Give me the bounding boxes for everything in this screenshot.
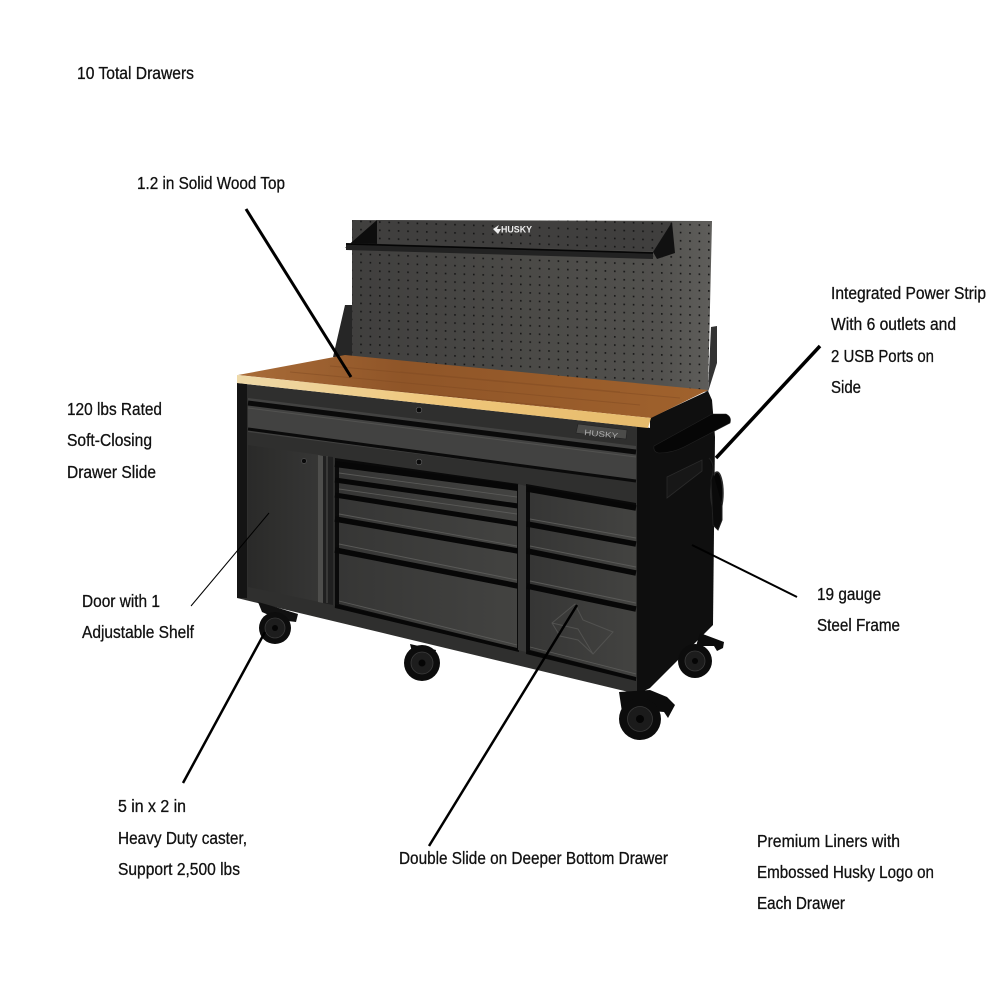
leader: wood top bbox=[246, 209, 351, 377]
leader lines bbox=[183, 209, 820, 846]
caster: front right with brake bbox=[619, 690, 675, 740]
right drawer stack bbox=[526, 484, 636, 681]
Husky badge: HUSKY bbox=[584, 428, 619, 441]
pegboard back panel bbox=[333, 220, 717, 392]
side frame bbox=[650, 391, 715, 688]
label: caster bbox=[118, 796, 247, 879]
label: premium liners bbox=[757, 831, 934, 913]
label: power strip: With 6 outlets and bbox=[831, 314, 956, 334]
leader: bottom drawer bbox=[429, 605, 577, 846]
drawer column divider bbox=[518, 484, 526, 652]
label: drawer slide: Soft-Closing bbox=[67, 430, 152, 450]
label: premium liners: Premium Liners with bbox=[757, 831, 900, 851]
label: steel frame: 19 gauge bbox=[817, 584, 881, 604]
label: premium liners: Embossed Husky Logo on bbox=[757, 862, 934, 882]
label: drawer slide: 120 lbs Rated bbox=[67, 399, 162, 419]
label: door shelf: Adjustable Shelf bbox=[82, 622, 194, 642]
wood top surface bbox=[238, 355, 708, 418]
label: premium liners: Each Drawer bbox=[757, 893, 845, 913]
Husky badge bbox=[576, 424, 627, 441]
label: drawer slide bbox=[67, 399, 162, 482]
label: drawer slide: Drawer Slide bbox=[67, 462, 156, 482]
leader: door bbox=[191, 513, 269, 606]
label: door shelf: Door with 1 bbox=[82, 591, 160, 611]
label: caster: Support 2,500 lbs bbox=[118, 859, 240, 879]
caster: front left bbox=[258, 602, 298, 644]
front left post bbox=[237, 383, 247, 598]
caster: rear right bbox=[678, 633, 724, 678]
label: door shelf bbox=[82, 591, 194, 642]
label: solid wood top: 1.2 in Solid Wood Top bbox=[137, 173, 285, 193]
power strip on side bbox=[667, 458, 723, 530]
label: steel frame bbox=[817, 584, 900, 635]
leader: caster bbox=[183, 632, 265, 783]
embossed Husky logo bbox=[552, 604, 613, 654]
cabinet door bbox=[248, 445, 333, 605]
top drawer panel bbox=[248, 398, 636, 482]
wood top front edge bbox=[237, 375, 651, 428]
label: power strip bbox=[831, 283, 986, 397]
label: double slide: Double Slide on Deeper Bottom Drawer bbox=[399, 848, 668, 868]
leader: power strip bbox=[716, 346, 820, 458]
workbench product photo bbox=[237, 220, 730, 740]
label: power strip: 2 USB Ports on bbox=[831, 346, 934, 366]
leader: steel frame bbox=[692, 545, 797, 597]
Husky logo on pegboard: HUSKY bbox=[501, 224, 533, 236]
label: power strip: Side bbox=[831, 377, 861, 397]
caster: middle bbox=[404, 644, 440, 681]
cabinet front frame bbox=[237, 383, 650, 694]
top shelf with brackets bbox=[345, 220, 675, 259]
side handle bbox=[654, 414, 730, 453]
label: power strip: Integrated Power Strip bbox=[831, 283, 986, 303]
label: caster: 5 in x 2 in bbox=[118, 796, 186, 816]
label: caster: Heavy Duty caster, bbox=[118, 828, 247, 848]
label: total drawers: 10 Total Drawers bbox=[77, 63, 194, 83]
center drawer stack bbox=[335, 458, 519, 652]
label: steel frame: Steel Frame bbox=[817, 615, 900, 635]
front right corner post bbox=[637, 426, 650, 694]
